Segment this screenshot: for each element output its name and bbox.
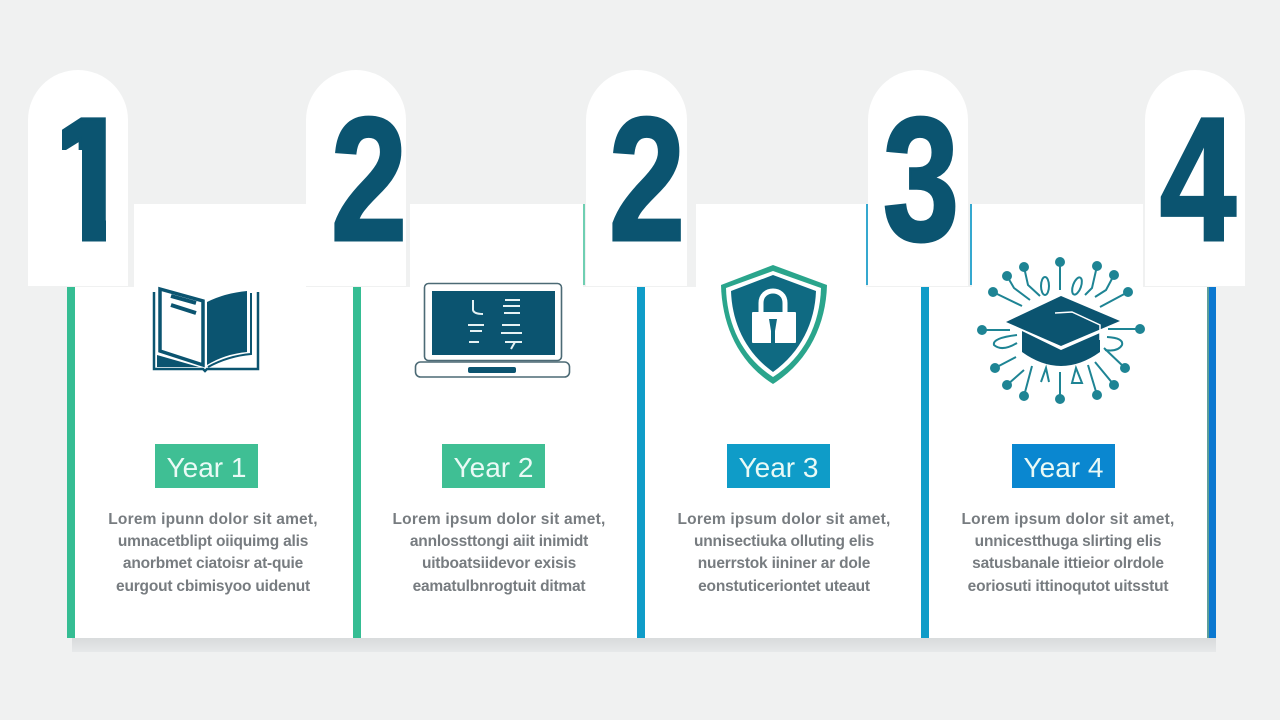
- accent line right of tab 4: [970, 204, 972, 285]
- body text: [678, 511, 890, 595]
- body text: Lorem ipsum dolor sit amet,: [678, 511, 890, 528]
- body text: eoriosuti ittinoqutot uitsstut: [968, 578, 1168, 595]
- right edge bar: [1207, 287, 1216, 638]
- body text: Lorem ipsum dolor sit amet,: [393, 511, 605, 528]
- body text: eamatulbnrogtuit ditmat: [413, 578, 585, 595]
- accent line left of tab 4: [866, 204, 868, 285]
- accent bar: [921, 287, 929, 638]
- digit 1: 1: [39, 82, 137, 278]
- badge: year 4: [1012, 444, 1115, 488]
- digit 2: 2: [609, 82, 685, 278]
- accent bar: [637, 287, 645, 638]
- body text: satusbanale ittieior olrdole: [972, 555, 1164, 572]
- body text: [108, 511, 318, 595]
- tab: number 4: [1145, 70, 1245, 286]
- digit 2: 2: [331, 82, 407, 278]
- accent line by tab 3: [583, 204, 585, 285]
- badge: year 3: Year 3: [739, 452, 818, 483]
- upper white band segment 3: [696, 204, 866, 288]
- tab: number 2 repeated: [586, 70, 687, 286]
- badge: year 1: [155, 444, 258, 488]
- tab: number 3: [868, 70, 968, 286]
- panel: year 3: [637, 287, 921, 638]
- tab: number 2: [306, 70, 406, 286]
- body text: anorbmet ciatoisr at-quie: [123, 555, 303, 572]
- body text: annlossttongi aiit inimidt: [410, 533, 588, 550]
- accent bar: [353, 287, 361, 638]
- icon: graduation cap with circuit nodes: [977, 257, 1145, 404]
- badge: year 4: Year 4: [1024, 452, 1103, 483]
- body text: [962, 511, 1174, 595]
- body text: unnisectiuka olluting elis: [694, 533, 874, 550]
- accent bar: [67, 287, 75, 638]
- body text: unnicestthuga slirting elis: [975, 533, 1161, 550]
- upper white band segment 4: [972, 204, 1143, 288]
- body text: eurgout cbimisyoo uidenut: [116, 578, 310, 595]
- panel: year 1: [67, 287, 353, 638]
- body text: eonstuticeriontet uteaut: [698, 578, 870, 595]
- upper white band segment 1: [134, 204, 306, 288]
- icon: security shield: [721, 265, 827, 384]
- panel: year 4: [921, 287, 1216, 638]
- badge: year 3: [727, 444, 830, 488]
- badge: year 2: Year 2: [454, 452, 533, 483]
- body text: uitboatsiidevor exisis: [422, 555, 576, 572]
- digit 4: 4: [1160, 82, 1236, 278]
- body text: Lorem ipsum dolor sit amet,: [962, 511, 1174, 528]
- badge: year 1: Year 1: [167, 452, 246, 483]
- icon: open book: [154, 289, 258, 371]
- body text: [393, 511, 605, 595]
- badge: year 2: [442, 444, 545, 488]
- icon: laptop: [416, 284, 570, 377]
- upper white band segment 2: [410, 204, 583, 288]
- panel: year 2: [353, 287, 637, 638]
- body text: nuerrstok iininer ar dole: [698, 555, 870, 572]
- body text: umnacetblipt oiiquimg alis: [118, 533, 308, 550]
- card shadow: [72, 638, 1216, 652]
- body text: Lorem ipunn dolor sit amet,: [108, 511, 318, 528]
- digit 3: 3: [883, 82, 959, 278]
- tab: number 1: [28, 70, 128, 286]
